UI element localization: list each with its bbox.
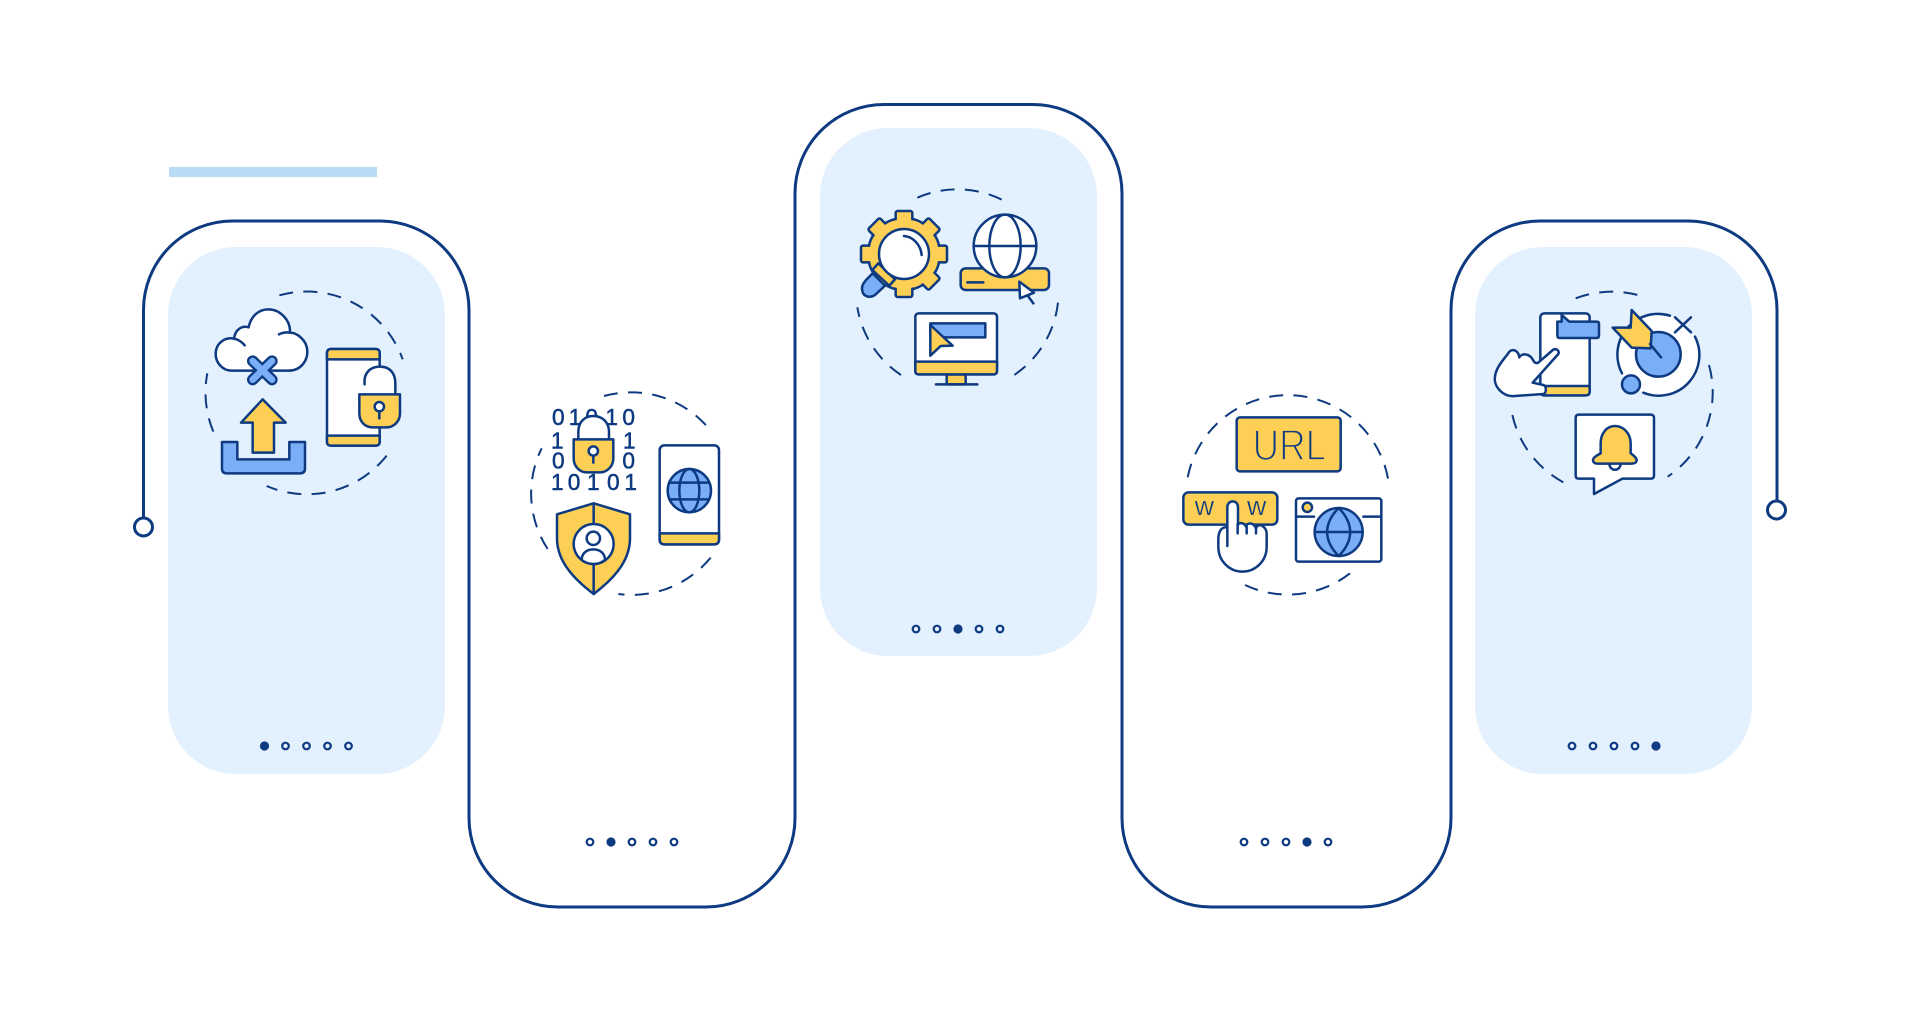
icon: binary lock, shield and globe phone	[531, 392, 719, 595]
www bar: w	[1246, 491, 1267, 521]
icon: chat bubble	[1557, 315, 1599, 338]
icon: shield with user	[557, 503, 630, 594]
icon: cross	[253, 361, 272, 380]
pager dots: panel 2	[587, 838, 677, 846]
pager dots: panel 5	[1569, 742, 1660, 750]
panel 5 background	[1475, 247, 1752, 774]
binary digits: 0	[552, 448, 565, 474]
binary digits	[551, 404, 637, 495]
binary digits: 0	[552, 404, 565, 430]
pager dots: panel 1	[261, 742, 352, 750]
icon: padlock	[574, 416, 613, 472]
icon: search bar	[961, 268, 1049, 290]
icon: bell message	[1576, 415, 1654, 494]
binary digits: 1	[623, 427, 636, 453]
icon: browser with globe	[1296, 498, 1381, 562]
winding connector outline	[144, 104, 1777, 907]
icon: upload arrow	[241, 399, 286, 453]
icon: target	[1613, 310, 1699, 396]
binary digits: 0	[585, 404, 598, 430]
binary digits: 0	[622, 448, 635, 474]
panel 3 background	[820, 128, 1097, 656]
icon: pointing hand	[1218, 501, 1267, 572]
URL box: URL	[1253, 421, 1326, 470]
icon: search gear, globe and monitor	[857, 189, 1058, 384]
binary digits: 0	[607, 469, 620, 495]
icon: tapping hand	[1495, 349, 1559, 396]
icon: cloud	[216, 309, 307, 371]
icon: cursor	[1019, 282, 1034, 303]
binary digits: 1	[624, 469, 637, 495]
icon: monitor	[915, 313, 997, 384]
icon: globe	[974, 215, 1036, 277]
pager dots: panel 4	[1241, 838, 1331, 846]
dashed ring	[857, 189, 1058, 377]
www bar	[1183, 491, 1277, 525]
icon: phone	[1540, 313, 1590, 395]
title placeholder bar	[169, 167, 377, 177]
dashed ring	[531, 392, 711, 595]
icon: phone with globe	[660, 445, 719, 544]
icon: cloud upload and phone lock	[206, 292, 403, 494]
binary digits: 1	[569, 404, 581, 430]
dashed ring	[1188, 395, 1389, 595]
panel 1 background	[168, 247, 445, 774]
icon: tray	[222, 442, 305, 473]
binary digits: 1	[551, 427, 564, 453]
icon: URL, www and browser	[1183, 395, 1389, 595]
icon: magnifier	[862, 229, 929, 297]
binary digits: 1	[605, 404, 618, 430]
end node	[1768, 501, 1786, 519]
icon: phone tap, target and bell	[1495, 292, 1713, 494]
binary digits: 1	[587, 469, 600, 495]
icon: phone	[327, 349, 380, 446]
binary digits: 1	[551, 469, 564, 495]
binary digits: 0	[568, 469, 580, 495]
icon: padlock	[359, 367, 400, 427]
start node	[134, 518, 152, 536]
dashed ring	[206, 292, 403, 494]
binary digits: 0	[622, 404, 635, 430]
pager dots: panel 3	[913, 626, 1003, 632]
www bar: w	[1194, 491, 1215, 521]
icon: gear	[861, 211, 947, 297]
dashed ring	[1512, 292, 1713, 482]
